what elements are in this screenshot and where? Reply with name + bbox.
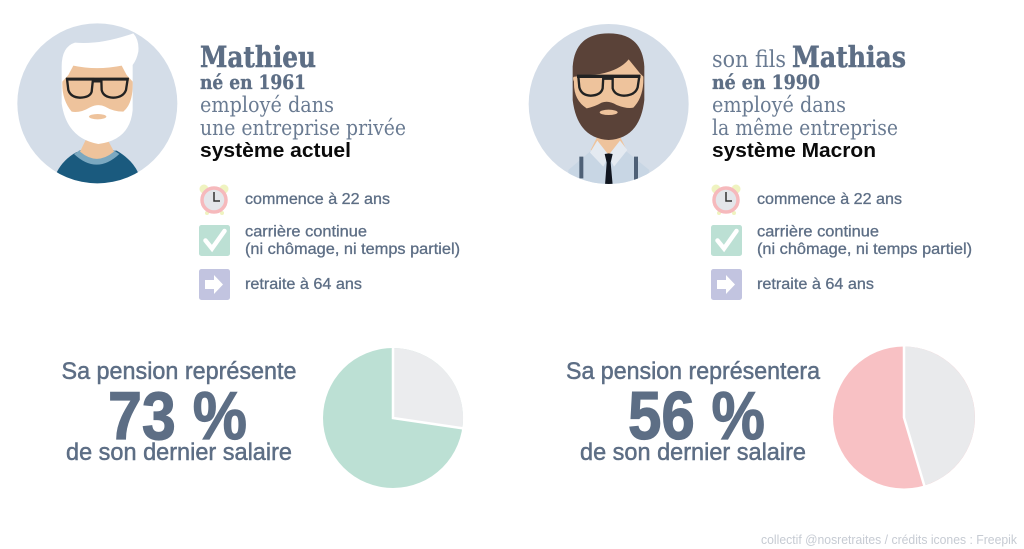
- name: son fils Mathias: son fils: [712, 47, 786, 73]
- job line 1: employé dans: [712, 93, 846, 117]
- icon: arrow: [711, 269, 742, 300]
- retires at 64: retraite à 64 ans: [245, 276, 362, 293]
- system: système actuel: [200, 139, 351, 162]
- icon: avatar of Mathieu: [17, 23, 177, 187]
- pension text 56%: [566, 358, 821, 466]
- name: son fils Mathias: [712, 40, 906, 74]
- pension text 56%: de son dernier salaire: [580, 439, 806, 466]
- continuous career: (ni chômage, ni temps partiel): [245, 241, 460, 258]
- job line 2: une entreprise privée: [200, 116, 406, 140]
- system: système Macron: [712, 139, 876, 162]
- pension text 73%: 73 %: [108, 378, 247, 454]
- name: Mathieu: Mathieu: [200, 40, 316, 74]
- retires at 64: retraite à 64 ans: [757, 276, 874, 293]
- starts at 22: commence à 22 ans: [757, 191, 902, 208]
- icon: check: [199, 225, 230, 256]
- panel: Mathieu: [17, 23, 464, 488]
- pension text 56%: 56 %: [628, 378, 765, 454]
- panel: Mathias: [529, 24, 975, 489]
- continuous career: [757, 224, 972, 258]
- job line 1: employé dans: [200, 93, 334, 117]
- continuous career: carrière continue: [245, 224, 367, 240]
- icon: alarm clock: [712, 184, 740, 215]
- pension text 73%: [62, 358, 296, 466]
- continuous career: (ni chômage, ni temps partiel): [757, 241, 972, 258]
- birth year: né en 1961: [200, 70, 306, 94]
- icon: check: [711, 225, 742, 256]
- starts at 22: commence à 22 ans: [245, 191, 390, 208]
- continuous career: [245, 224, 460, 258]
- pension text 73%: de son dernier salaire: [66, 439, 292, 466]
- name: son fils Mathias: Mathias: [792, 40, 906, 74]
- icon: avatar of Mathias: [529, 24, 689, 187]
- continuous career: carrière continue: [757, 224, 879, 240]
- pension text 73%: Sa pension représente: [62, 358, 296, 385]
- pension text 56%: Sa pension représentera: [566, 358, 821, 385]
- icon: alarm clock: [200, 184, 228, 215]
- job line 2: la même entreprise: [712, 116, 898, 140]
- footer credits: collectif @nosretraites / crédits icones : Freepik: [761, 533, 1018, 547]
- pie chart 56%: [833, 345, 975, 488]
- birth year: né en 1990: [712, 70, 820, 94]
- icon: arrow: [199, 269, 230, 300]
- pie chart 73%: [323, 346, 464, 488]
